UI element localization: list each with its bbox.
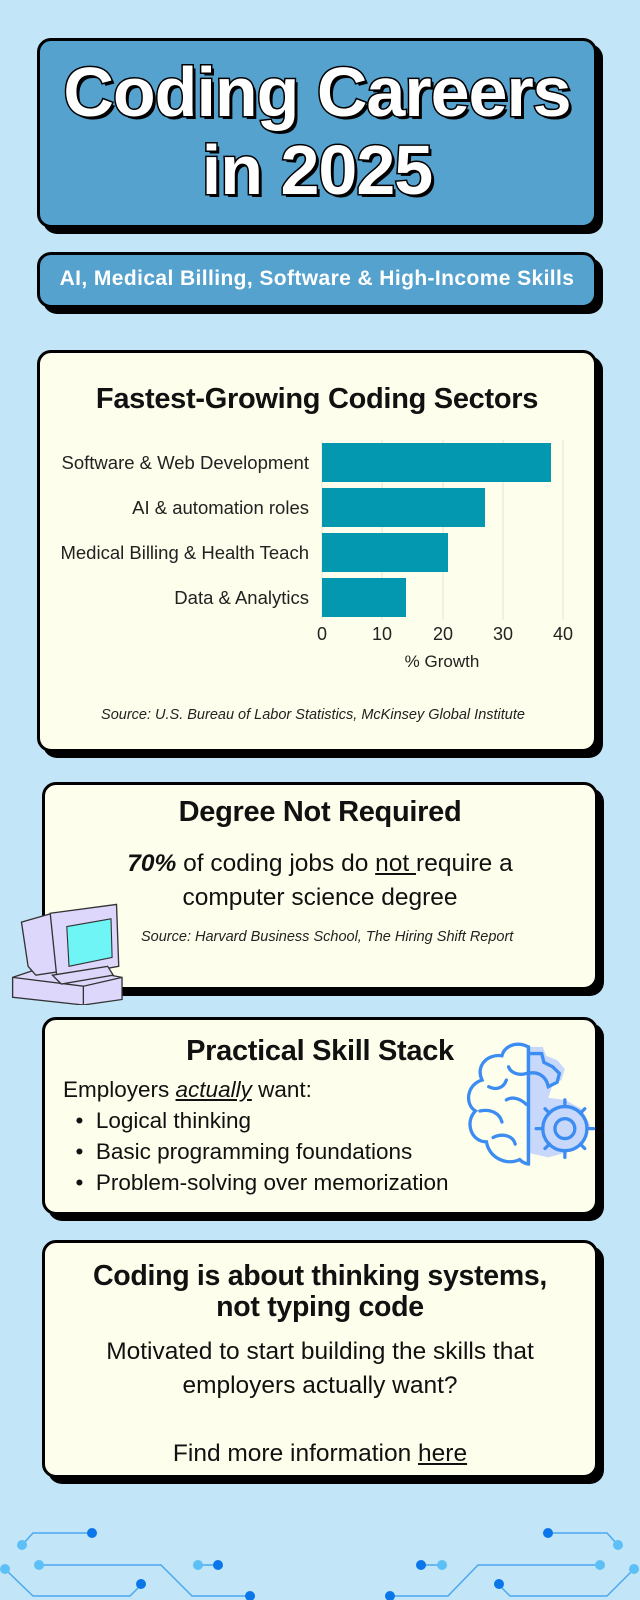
skills list [63,1077,449,1195]
panel: degree not required [42,782,598,990]
title box [37,38,597,228]
skills list: • Logical thinking [76,1108,251,1133]
title text [63,53,572,209]
bar chart: Medical Billing & Health Teach [60,542,309,563]
decoration: circuit lines [0,1528,639,1600]
stat text: 70% of coding jobs do not require a [127,850,513,877]
body text: employers actually want? [182,1372,458,1399]
bar chart [60,440,573,723]
body text: Find more information here [173,1440,467,1467]
stat text: computer science degree [182,884,458,911]
bar chart: 40 [553,624,573,644]
heading: not typing code [216,1291,424,1323]
skills list: • Problem-solving over memorization [76,1170,449,1195]
body text: Motivated to start building the skills that [106,1338,534,1365]
bar chart: Source: U.S. Bureau of Labor Statistics, McKinsey Global Institute [101,707,525,723]
skills list: Employers actually want: [63,1077,312,1102]
icon: brain gears [466,1042,596,1166]
body text [106,1338,534,1467]
source: Source: Harvard Business School, The Hiring Shift Report [141,929,513,945]
bar chart: 30 [493,624,513,644]
heading [93,1260,547,1323]
skills list: • Basic programming foundations [76,1139,412,1164]
bar chart: 0 [317,624,327,644]
subtitle box [37,252,597,308]
subtitle text: AI, Medical Billing, Software & High-Income Skills [60,267,574,290]
bar chart: 10 [372,624,392,644]
title text: in 2025 [202,131,432,209]
stat text [127,850,513,911]
bar chart: % Growth [405,652,479,671]
heading: Fastest-Growing Coding Sectors [96,383,538,415]
panel: practical skill stack [42,1017,598,1215]
heading: Practical Skill Stack [186,1035,454,1067]
panel: call to action [42,1240,598,1478]
bar chart: 20 [433,624,453,644]
heading: Coding is about thinking systems, [93,1260,547,1292]
heading: Degree Not Required [179,796,461,828]
bar chart: Software & Web Development [62,452,309,473]
panel: fastest-growing sectors [37,350,597,752]
bar chart: AI & automation roles [132,497,309,518]
title text: Coding Careers [63,53,571,131]
bar chart: Data & Analytics [174,587,309,608]
icon: computer [12,904,123,1005]
